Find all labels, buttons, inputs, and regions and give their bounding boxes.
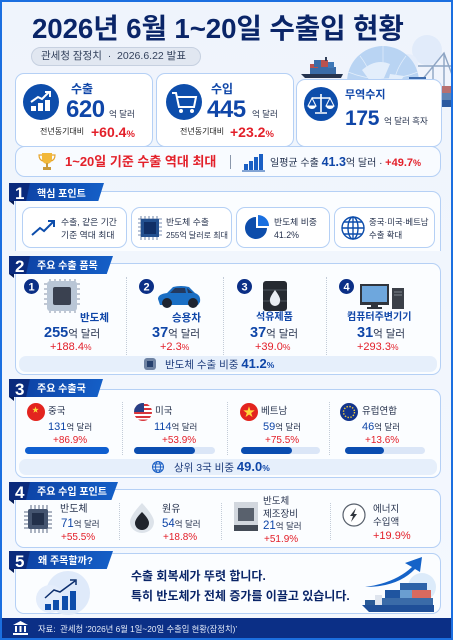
market: EU: 46억 달러 [362, 421, 400, 433]
import: crude oil: 원유 [162, 504, 180, 515]
panel: section 1 key points [15, 191, 441, 251]
key point: markets: 수출 확대 [369, 230, 402, 240]
import: semiconductor [24, 503, 100, 543]
icon: trophy [38, 153, 56, 170]
import change: 전년동기대비 [180, 127, 224, 136]
import: crude oil [130, 503, 201, 543]
text: 4 [15, 483, 24, 502]
market: China: 중국 [48, 406, 65, 417]
key point: share: 반도체 비중 [274, 217, 317, 227]
item: car [139, 279, 201, 353]
text: 2 [15, 257, 24, 276]
text: 1 [15, 184, 24, 203]
item: car: 2 [143, 282, 150, 294]
text: 3 [15, 380, 24, 399]
import: semiconductor: 반도체 [60, 504, 88, 515]
market: China: ★ [32, 406, 39, 414]
market: China [25, 403, 109, 454]
card: export: +60.4% [91, 124, 135, 140]
icon: scales [304, 87, 338, 121]
item: car: +2.3% [160, 341, 189, 353]
key point: chips [131, 207, 232, 248]
subtitle pill [31, 47, 201, 66]
import: crude oil: 54억 달러 [162, 518, 201, 530]
icon: cart [166, 84, 202, 120]
market: China: 131억 달러 [48, 421, 92, 433]
market: Vietnam: 베트남 [261, 406, 287, 417]
import: energy [342, 503, 411, 542]
item: semiconductor: 반도체 [80, 312, 109, 324]
panel: section 4 main imports [15, 489, 441, 548]
section 5 heading [9, 551, 113, 569]
illustration: container ship [301, 57, 343, 78]
card: balance [296, 79, 442, 147]
text: 5 [15, 552, 24, 571]
daily average: 일평균 수출 41.3억 달러 · +49.7% [270, 155, 421, 169]
export value: 620 [66, 96, 105, 123]
item: computer: 4 [343, 282, 350, 294]
message text [131, 569, 350, 603]
illustration: container ship with arrow [362, 557, 436, 612]
import: chip equipment [234, 496, 302, 545]
market: Vietnam: ★ [243, 405, 255, 419]
card: export: 억 달러 [109, 109, 135, 119]
callout: top three share [19, 459, 437, 475]
panel: section 2 main export items [15, 263, 441, 375]
import: semiconductor: +55.5% [61, 532, 95, 543]
message text: 특히 반도체가 전체 증가를 이끌고 있습니다. [131, 589, 350, 603]
item: computer: 31억 달러 [357, 325, 405, 341]
callout: semiconductor share [19, 356, 437, 372]
text: 핵심 포인트 [37, 189, 86, 200]
import: chip equipment: 제조장비 [263, 508, 298, 520]
key point: record: 수출, 같은 기간 [61, 217, 117, 227]
item: car: 37억 달러 [152, 325, 200, 341]
callout: semiconductor share: 반도체 수출 비중 41.2% [165, 356, 274, 371]
key point: markets [334, 207, 435, 248]
card: import: 억 달러 [252, 109, 278, 119]
section 4 heading [9, 482, 118, 500]
key point: markets: 중국·미국·베트남 [369, 217, 429, 227]
card: export [15, 73, 153, 147]
icon: bars [242, 154, 265, 172]
item: semiconductor [24, 279, 109, 353]
market: EU: +13.6% [365, 435, 399, 446]
export change: 전년동기대비 [40, 127, 84, 136]
item: semiconductor: 1 [28, 282, 35, 294]
import: energy: 에너지 [373, 504, 399, 515]
market: USA: +53.9% [162, 435, 196, 446]
item: semiconductor: +188.4% [50, 341, 92, 353]
footer [2, 618, 451, 638]
import: semiconductor: 71억 달러 [61, 518, 100, 530]
market: Vietnam [240, 403, 320, 454]
item: computer: +293.3% [357, 341, 399, 353]
item: computer: 컴퓨터주변기기 [347, 312, 411, 323]
title: 2026년 6월 1~20일 수출입 현황 [32, 13, 404, 44]
market: USA [134, 403, 215, 454]
import value: 445 [207, 96, 246, 123]
import label: 수입 [211, 82, 233, 96]
icon: rising bars [23, 84, 59, 120]
panel: section 5 why it matters [15, 553, 441, 614]
section 1 heading [9, 183, 104, 201]
market: USA: 114억 달러 [154, 421, 197, 433]
card: import: +23.2% [230, 124, 274, 140]
import: energy: +19.9% [373, 530, 411, 542]
item: petroleum: 37억 달러 [250, 325, 298, 341]
subtitle pill: 관세청 잠정치 · 2026.6.22 발표 [41, 50, 186, 62]
export label: 수출 [71, 82, 93, 96]
market: Vietnam: 59억 달러 [263, 421, 301, 433]
source: 자료: 관세청 ‘2026년 6월 1일~20일 수출입 현황(잠정치)’ [38, 624, 237, 634]
item: petroleum: 3 [241, 282, 248, 294]
balance value: 175 [345, 107, 379, 130]
market: EU: 유럽연합 [362, 406, 397, 417]
import: chip equipment: 반도체 [263, 496, 289, 507]
key point: chips: 반도체 수출 [166, 217, 209, 227]
section 2 heading [9, 256, 113, 274]
text: 주요 수출국 [37, 384, 86, 395]
item: petroleum [237, 279, 298, 353]
market: China: +86.9% [53, 435, 87, 446]
key point: chips: 255억 달러로 최대 [166, 231, 228, 240]
illustration: globe, port crane and cloud [347, 35, 451, 107]
market: Vietnam: +75.5% [265, 435, 299, 446]
icon: institution [13, 621, 28, 635]
text: 주요 수출 품목 [37, 261, 98, 272]
icon: growth chart in cloud [36, 571, 90, 615]
message text: 수출 회복세가 뚜렷 합니다. [131, 569, 266, 583]
import: chip equipment: +51.9% [264, 534, 298, 545]
key point: record: 기준 역대 최대 [61, 230, 114, 240]
panel: section 3 main markets [15, 389, 441, 478]
section 3 heading [9, 379, 103, 397]
import: chip equipment: 21억 달러 [263, 520, 302, 532]
key point: share: 41.2% [274, 230, 299, 240]
callout: top three share: 상위 3국 비중 49.0% [174, 459, 270, 474]
market: USA: 미국 [155, 406, 172, 417]
highlight strip [15, 146, 441, 177]
key point: share [236, 207, 330, 248]
card: balance: 억 달러 흑자 [384, 116, 428, 126]
item: computer [339, 279, 411, 353]
text: 주요 수입 포인트 [37, 487, 107, 498]
record headline: 1~20일 기준 수출 역대 최대 [65, 154, 216, 169]
item: petroleum: +39.0% [255, 341, 290, 353]
item: car: 승용차 [172, 312, 201, 324]
import: crude oil: +18.8% [163, 532, 197, 543]
import: energy: 수입액 [373, 516, 399, 528]
card: import [156, 73, 294, 147]
item: petroleum: 석유제품 [256, 312, 293, 323]
text: 왜 주목할까? [38, 556, 93, 567]
market: EU [340, 403, 425, 454]
balance label: 무역수지 [345, 89, 385, 101]
key point: record [22, 207, 127, 248]
item: semiconductor: 255억 달러 [44, 325, 100, 341]
